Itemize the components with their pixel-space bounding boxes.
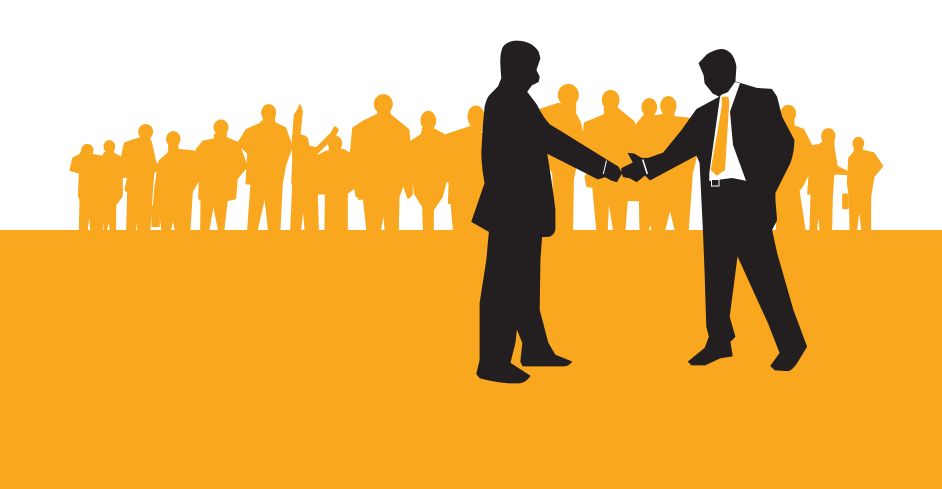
person 12 <box>540 85 583 229</box>
left businessman <box>472 41 622 383</box>
person 1 on phone <box>71 145 103 229</box>
crowd: left group <box>71 105 360 229</box>
person 17 <box>808 129 847 229</box>
person 5 <box>192 121 247 229</box>
person 10 woman <box>408 112 453 229</box>
person 18 with briefcase <box>843 138 882 229</box>
left man shirt cuff <box>603 160 606 174</box>
person 9 large <box>348 95 412 229</box>
persons 14 and 15 <box>607 97 697 229</box>
person 6 tall <box>238 105 292 229</box>
crowd: right group <box>607 97 882 229</box>
person 4 with briefcase <box>153 132 198 229</box>
right man shirt cuff <box>643 160 647 174</box>
person 8 <box>317 137 360 229</box>
person 3 <box>121 125 160 229</box>
person 11 behind left man <box>447 107 487 229</box>
right man silhouette <box>622 49 807 371</box>
right man belt buckle <box>712 180 719 186</box>
person 7 pointing <box>291 106 338 229</box>
right man orange tie <box>711 97 729 176</box>
person 2 woman <box>100 141 128 229</box>
ground band <box>0 230 942 489</box>
crowd of orange silhouettes <box>71 85 882 229</box>
crowd: centre group <box>348 85 640 229</box>
right businessman <box>622 49 807 371</box>
person 16 <box>770 106 812 229</box>
left man silhouette <box>472 41 622 383</box>
person 13 <box>583 91 640 229</box>
right man white shirt <box>709 82 746 181</box>
